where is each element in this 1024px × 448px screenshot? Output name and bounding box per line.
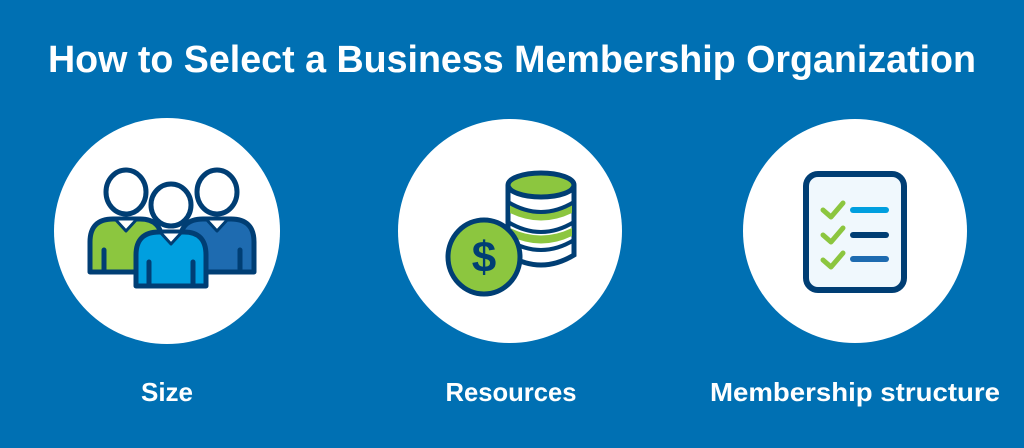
- icon: checklist: [806, 174, 904, 290]
- panel: membership structure: [743, 119, 967, 343]
- icon: coins: [448, 173, 574, 294]
- title: How to Select a Business Membership Organization: [48, 39, 976, 81]
- panel: resources: [398, 119, 622, 343]
- label: size: Size: [141, 377, 193, 407]
- circle: resources: [398, 119, 622, 343]
- label: resources: Resources: [446, 377, 576, 407]
- label: membership structure: Membership structure: [710, 377, 1000, 407]
- circle: size: [54, 118, 280, 344]
- circle: membership structure: [743, 119, 967, 343]
- icon: people: [90, 170, 254, 286]
- panel: size: [54, 118, 280, 344]
- icon: coins: $: [472, 233, 496, 282]
